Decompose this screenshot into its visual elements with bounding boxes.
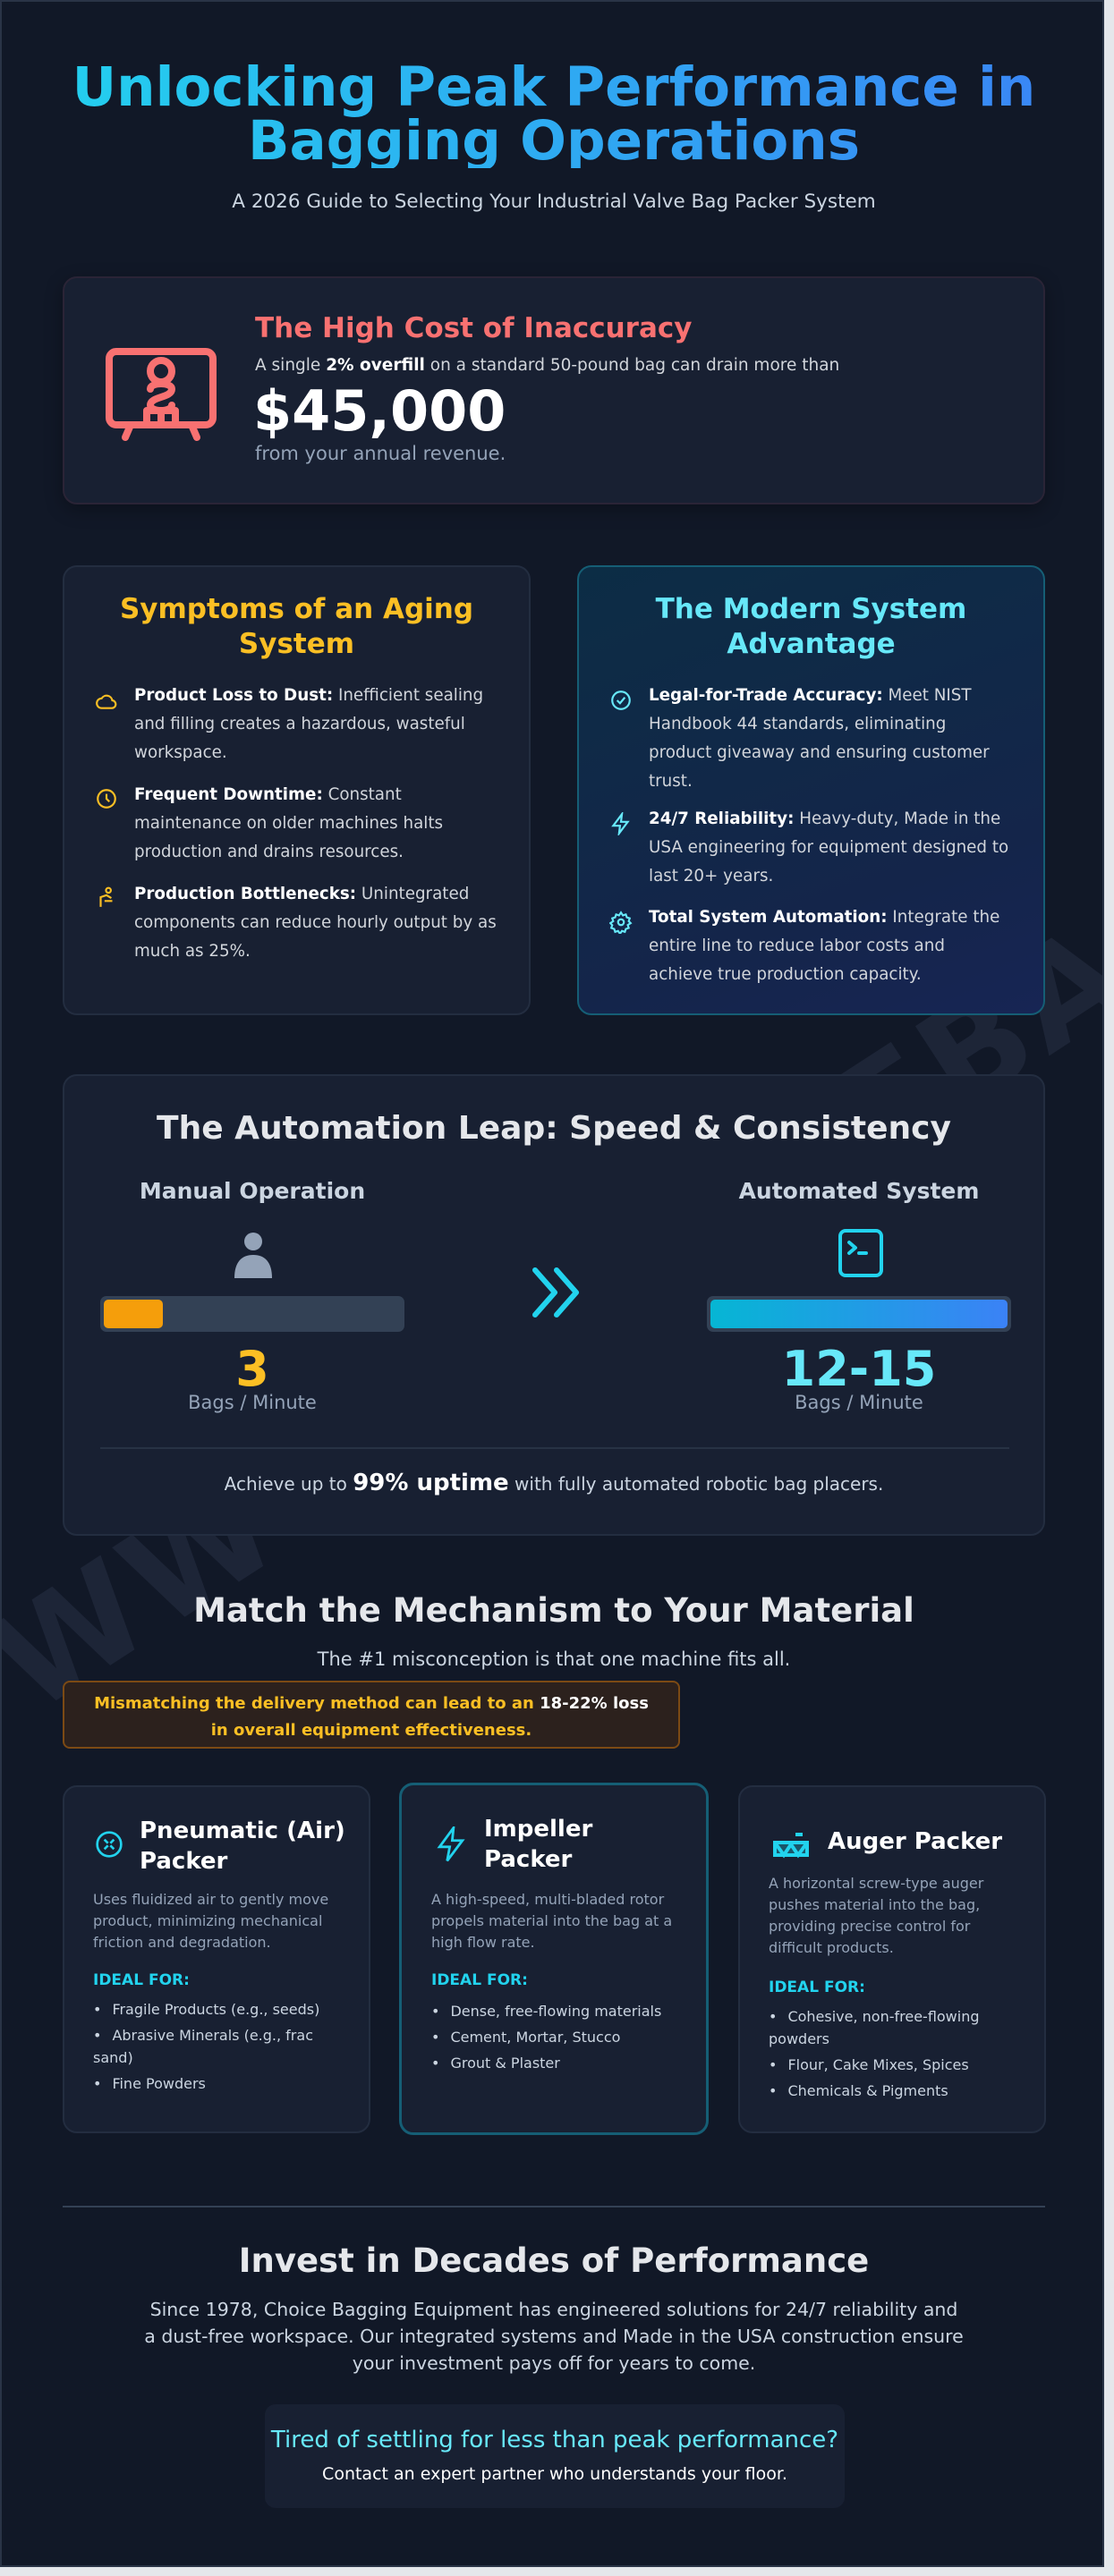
automated column (707, 1178, 1011, 1413)
text: from your annual revenue. (255, 443, 506, 464)
panel: auger (738, 1785, 1046, 2133)
icon: machine (106, 348, 217, 441)
CTA text: Contact an expert partner who understands your floor. (322, 2464, 787, 2484)
callout: CTA (265, 2404, 845, 2508)
title: Unlocking Peak Performance in (72, 55, 1035, 119)
arrow (532, 1267, 580, 1318)
heading: The High Cost of Inaccuracy (255, 312, 692, 344)
item: Legal-for-Trade Accuracy: Meet NIST Handbook 44 standards, eliminating product giveaway and ensuring customer trust. (649, 686, 990, 791)
title: Pneumatic (Air) (140, 1818, 345, 1844)
title: Bagging Operations (248, 109, 860, 173)
title: Packer (140, 1848, 227, 1875)
desc: A horizontal screw-type auger pushes material into the bag, providing precise control for difficult products. (769, 1875, 983, 1956)
text: A single 2% overfill on a standard 50-pound bag can drain more than (255, 356, 839, 375)
item: Product Loss to Dust: Inefficient sealing and filling creates a hazardous, wasteful workspace. (134, 686, 483, 762)
icon: bolt (611, 812, 630, 835)
subtitle: The #1 misconception is that one machine fits all. (318, 1648, 790, 1670)
ideal: IDEAL FOR: (769, 1979, 865, 1996)
panel: high cost (63, 276, 1045, 504)
heading: The Modern System (656, 593, 966, 625)
item: achieve true production capacity. (649, 965, 922, 984)
icon: drop (96, 694, 116, 709)
icon: bolt (437, 1826, 465, 1862)
bar (100, 1296, 404, 1332)
subtitle: A 2026 Guide to Selecting Your Industrial Valve Bag Packer System (232, 191, 876, 213)
list: Fine Powders (112, 2075, 206, 2092)
title: Auger Packer (828, 1828, 1002, 1855)
icon: gear (609, 911, 632, 934)
footer text: Achieve up to 99% uptime with fully automated robotic bag placers. (225, 1470, 883, 1496)
list: Fragile Products (e.g., seeds) (112, 2001, 319, 2018)
list: Flour, Cake Mixes, Spices (787, 2056, 969, 2073)
unit: Bags / Minute (188, 1392, 317, 1413)
panel: automation leap (63, 1074, 1045, 1536)
icon: check (611, 691, 631, 710)
icon: auger (773, 1833, 809, 1859)
paragraph: Since 1978, Choice Bagging Equipment has engineered solutions for 24/7 reliability and (150, 2299, 957, 2320)
title: Packer (484, 1846, 572, 1873)
paragraph (144, 2299, 964, 2374)
item: entire line to reduce labor costs and (649, 936, 945, 955)
list (93, 2001, 319, 2092)
list: Cement, Mortar, Stucco (450, 2029, 620, 2046)
title (2, 61, 1106, 168)
manual column (100, 1178, 404, 1413)
title: Impeller (484, 1816, 592, 1843)
icon: person (234, 1233, 272, 1278)
list: Chemicals & Pigments (787, 2082, 948, 2099)
item: Production Bottlenecks: Unintegrated components can reduce hourly output by as much as 25%. (134, 885, 497, 961)
label: Automated System (739, 1178, 979, 1204)
desc: A high-speed, multi-bladed rotor propels material into the bag at a high flow rate. (431, 1891, 672, 1951)
item: Frequent Downtime: Constant maintenance on older machines halts production and drains resources. (134, 785, 443, 861)
paragraph: your investment pays off for years to come. (353, 2352, 755, 2374)
label: Manual Operation (140, 1178, 365, 1204)
list: Cohesive, non-free-flowing powders (769, 2008, 980, 2047)
title (484, 1816, 592, 1873)
list: Dense, free-flowing materials (450, 2003, 661, 2020)
heading: match mechanism: Match the Mechanism to Your Material (193, 1591, 914, 1630)
heading: invest: Invest in Decades of Performance (239, 2241, 869, 2280)
list (769, 2008, 980, 2099)
panel: pneumatic (63, 1785, 370, 2133)
icon: fan (96, 1831, 123, 1858)
ideal: IDEAL FOR: (93, 1971, 190, 1989)
item: 24/7 Reliability: Heavy-duty, Made in the USA engineering for equipment designed to last 20+ years. (649, 809, 1008, 886)
big number: $45,000 (253, 378, 506, 444)
ideal: IDEAL FOR: (431, 1971, 528, 1989)
heading (120, 593, 473, 660)
item (649, 908, 999, 984)
panel: modern system (577, 565, 1045, 1015)
callout: warning: in overall equipment effectiveness. (211, 1721, 531, 1740)
list (433, 2003, 661, 2072)
icon: terminal (838, 1229, 883, 1277)
item: Total System Automation: Integrate the (649, 908, 999, 927)
heading: System (239, 628, 354, 660)
heading (655, 593, 966, 660)
icon: person (99, 887, 113, 907)
list: Grout & Plaster (450, 2055, 560, 2072)
number: 12-15 (782, 1341, 936, 1397)
title (140, 1818, 345, 1875)
number: 3 (235, 1341, 269, 1397)
panel: impeller (399, 1783, 709, 2135)
heading: Advantage (727, 628, 896, 660)
list: Abrasive Minerals (e.g., frac sand) (93, 2027, 313, 2066)
bar (707, 1296, 1011, 1332)
callout: warning (63, 1681, 680, 1749)
icon: clock (97, 789, 116, 809)
panel: symptoms (63, 565, 531, 1015)
heading: The Automation Leap: Speed & Consistency (157, 1110, 951, 1147)
heading: Symptoms of an Aging (120, 593, 473, 625)
desc: Uses fluidized air to gently move product, minimizing mechanical friction and degradation. (93, 1891, 328, 1951)
callout: warning: Mismatching the delivery method can lead to an 18-22% loss (94, 1694, 649, 1713)
unit: Bags / Minute (795, 1392, 923, 1413)
CTA heading: Tired of settling for less than peak performance? (271, 2427, 838, 2453)
paragraph: a dust-free workspace. Our integrated systems and Made in the USA construction ensure (144, 2326, 964, 2347)
